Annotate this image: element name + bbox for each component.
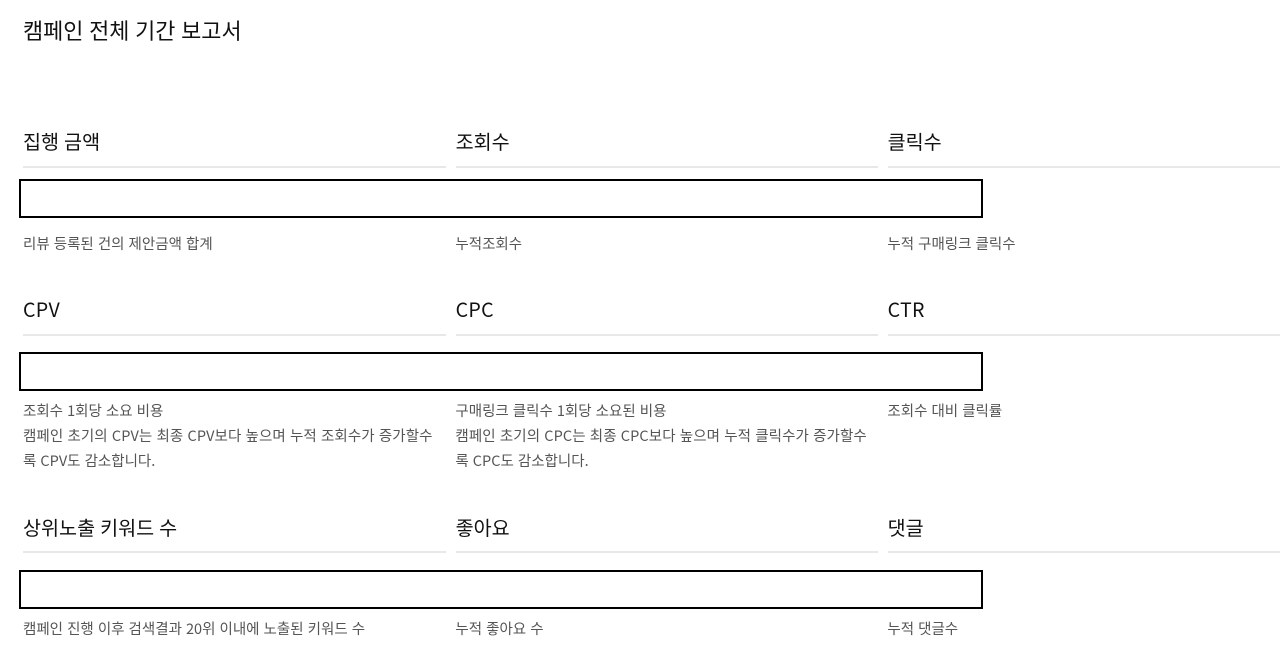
description: CPV: 캠페인 초기의 CPV는 최종 CPV보다 높으며 누적 조회수가 증가할수: [23, 425, 433, 446]
description: CPC: 캠페인 초기의 CPC는 최종 CPC보다 높으며 누적 클릭수가 증가할수: [455, 425, 867, 446]
description: CPV: [23, 400, 433, 471]
metric: CTR: CTR: [888, 294, 925, 323]
description: clicks: 누적 구매링크 클릭수: [887, 233, 1016, 254]
metric: views: 조회수: [456, 126, 510, 155]
description: likes: 누적 좋아요 수: [455, 618, 544, 639]
description: CPC: 구매링크 클릭수 1회당 소요된 비용: [455, 400, 666, 421]
description: CTR: 조회수 대비 클릭률: [887, 400, 1002, 421]
description: comments: 누적 댓글수: [887, 618, 958, 639]
metric: likes: 좋아요: [456, 512, 510, 541]
metric: clicks: 클릭수: [888, 126, 942, 155]
title: 캠페인 전체 기간 보고서: [23, 15, 242, 46]
redaction box row 1: [19, 179, 983, 218]
description: spend: 리뷰 등록된 건의 제안금액 합계: [23, 233, 213, 254]
description: CPC: [455, 400, 867, 471]
redaction box row 3: [19, 570, 983, 609]
metric: comments: 댓글: [888, 512, 924, 541]
description: views: 누적조회수: [455, 233, 522, 254]
description: CPV: 록 CPV도 감소합니다.: [23, 450, 155, 471]
description: CPC: 록 CPC도 감소합니다.: [455, 450, 589, 471]
metric: top keywords: 상위노출 키워드 수: [23, 512, 177, 541]
description: CPV: 조회수 1회당 소요 비용: [23, 400, 163, 421]
metric: CPV: CPV: [23, 294, 60, 323]
metric: CPC: CPC: [456, 294, 494, 323]
redaction box row 2: [19, 352, 983, 391]
metric: spend: 집행 금액: [23, 126, 100, 155]
description: keywords: 캠페인 진행 이후 검색결과 20위 이내에 노출된 키워드 수: [23, 618, 365, 639]
